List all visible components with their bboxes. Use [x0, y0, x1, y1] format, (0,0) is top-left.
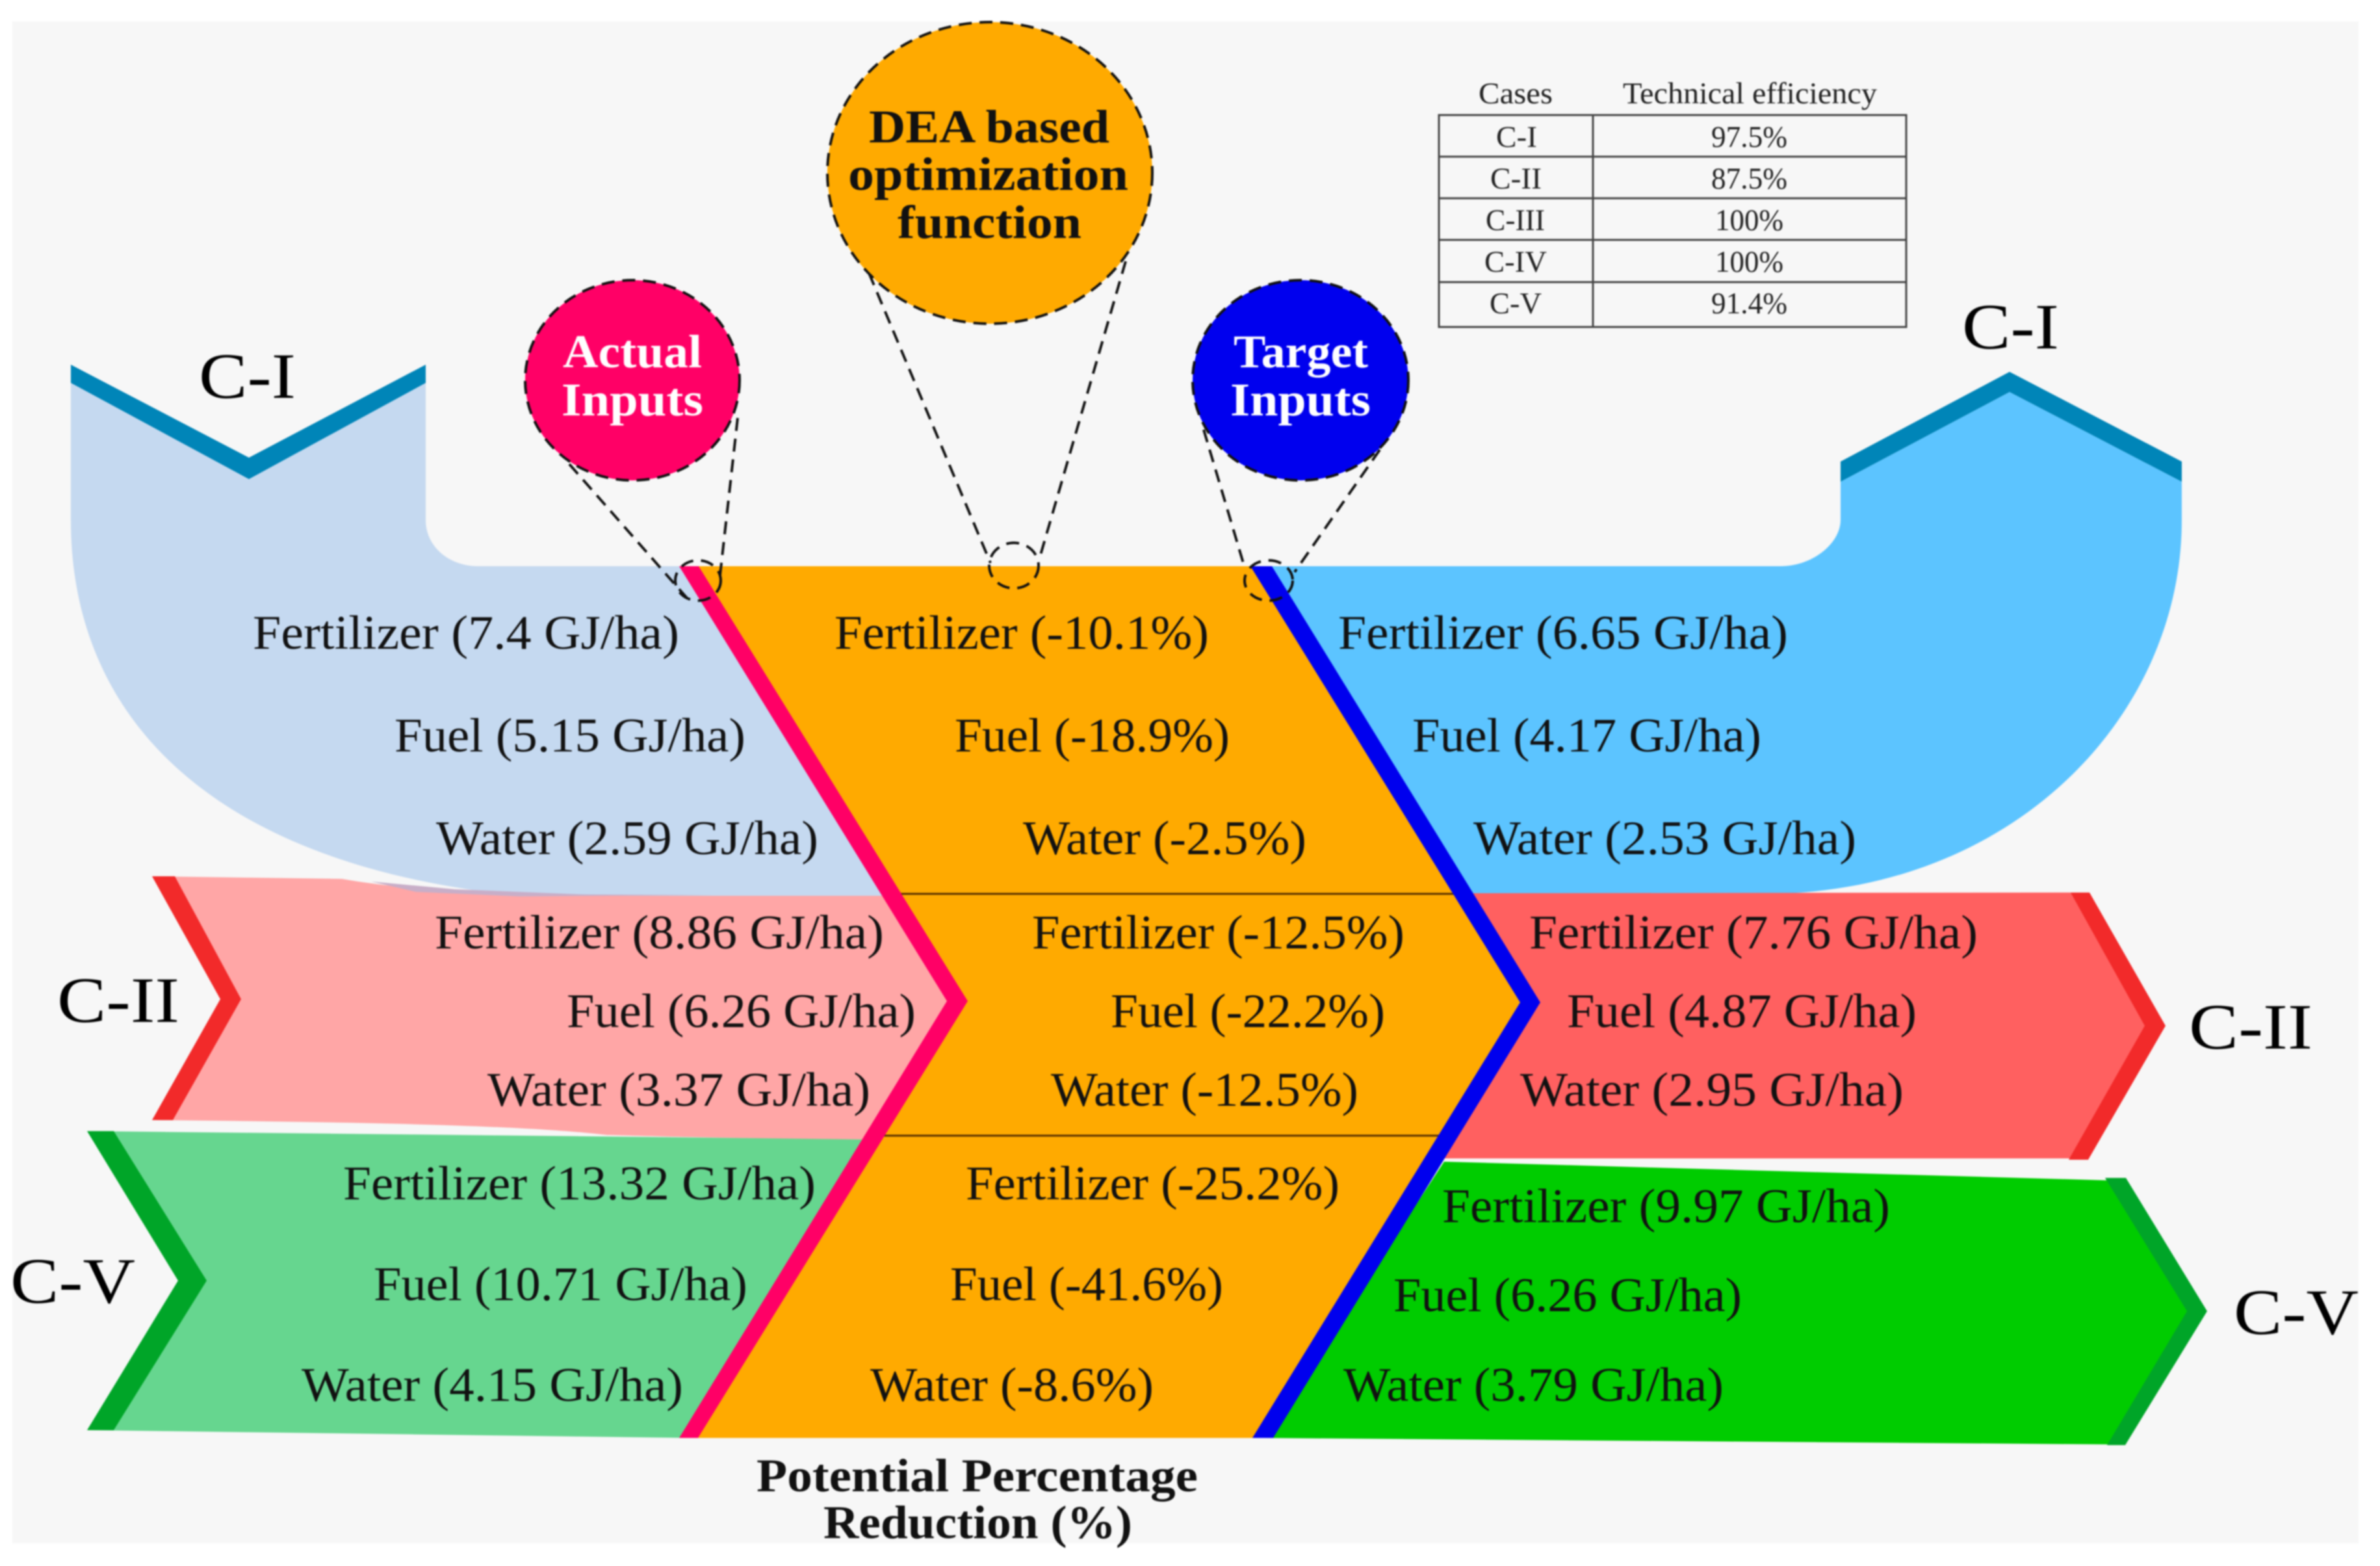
text: C-I actual values: Water (2.59 GJ/ha): [436, 812, 818, 865]
text: C-V target values: Water (3.79 GJ/ha): [1343, 1359, 1724, 1412]
text: C-II target values: Water (2.95 GJ/ha): [1520, 1064, 1904, 1117]
text: C-I reductions: Fuel (-18.9%): [955, 709, 1230, 763]
chevron: C-II left: [152, 876, 241, 1120]
case labels: C-I: [1962, 291, 2059, 363]
table: technical efficiency: C-IV: [1484, 245, 1547, 279]
caption: potential percentage reduction: Reduction (%): [823, 1496, 1132, 1548]
callout: Actual Inputs: Inputs: [562, 374, 703, 426]
chevron: C-V left: [87, 1131, 207, 1430]
panel: C-I target inputs: [1254, 372, 2182, 894]
text: C-V reductions: Fertilizer (-25.2%): [966, 1157, 1339, 1210]
table: technical efficiency: 100%: [1715, 245, 1783, 279]
text: C-V actual values: Fuel (10.71 GJ/ha): [374, 1258, 747, 1311]
case labels: C-II: [57, 964, 179, 1036]
text: C-I target values: [1338, 607, 1856, 865]
text: C-II reductions: Fertilizer (-12.5%): [1032, 906, 1404, 959]
panel: potential reduction: [689, 566, 1527, 1438]
text: C-V actual values: [302, 1157, 816, 1412]
row dividers: [877, 894, 1456, 1136]
panel: C-II actual inputs: [152, 876, 968, 1140]
stripe: target inputs boundary: [1250, 566, 1540, 1438]
callout: Target Inputs: Inputs: [1230, 374, 1371, 426]
text: C-I reductions: Water (-2.5%): [1023, 812, 1306, 865]
text: C-I actual values: [253, 607, 818, 865]
text: C-I actual values: Fuel (5.15 GJ/ha): [395, 709, 745, 763]
text: C-I target values: Fertilizer (6.65 GJ/ha): [1338, 607, 1788, 660]
chevron: C-I left: [71, 365, 426, 479]
table: technical efficiency: C-III: [1486, 203, 1545, 237]
callout: Actual Inputs: Actual: [563, 326, 702, 378]
table: technical efficiency: C-V: [1490, 287, 1542, 320]
text: C-I target values: Fuel (4.17 GJ/ha): [1412, 709, 1761, 763]
table: technical efficiency: 91.4%: [1711, 287, 1787, 320]
case labels: C-II: [2189, 991, 2312, 1063]
text: C-V target values: [1343, 1180, 1890, 1412]
text: C-II target values: [1520, 906, 1978, 1117]
case labels: C-V: [2234, 1276, 2359, 1348]
callout: DEA based optimization function: function: [898, 196, 1081, 248]
chevron: C-I right: [1841, 372, 2182, 482]
text: C-V reductions: [870, 1157, 1339, 1412]
text: C-V actual values: Fertilizer (13.32 GJ/ha): [343, 1157, 816, 1210]
callout leaders: [569, 261, 1380, 601]
text: C-II reductions: Fuel (-22.2%): [1111, 985, 1385, 1038]
table: technical efficiency: Technical efficiency: [1623, 77, 1877, 111]
case labels: C-I: [199, 340, 296, 412]
callout: Target Inputs: [1193, 280, 1408, 480]
text: C-II target values: Fuel (4.87 GJ/ha): [1567, 985, 1917, 1038]
text: C-V reductions: Water (-8.6%): [870, 1359, 1154, 1412]
table: technical efficiency: C-I: [1496, 120, 1537, 154]
case labels: C-V: [10, 1245, 135, 1317]
caption: potential percentage reduction: Potential Percentage: [757, 1450, 1198, 1502]
callout: Target Inputs: Target: [1234, 326, 1368, 378]
text: C-II reductions: [1032, 906, 1404, 1117]
table: technical efficiency: [1439, 77, 1906, 327]
table: technical efficiency: 100%: [1715, 203, 1783, 237]
text: C-II target values: Fertilizer (7.76 GJ/ha): [1529, 906, 1978, 959]
panel: C-II target inputs: [1436, 893, 2166, 1160]
text: C-II reductions: Water (-12.5%): [1051, 1064, 1358, 1117]
text: C-I reductions: [834, 607, 1306, 865]
text: C-V target values: Fertilizer (9.97 GJ/ha): [1442, 1180, 1890, 1233]
text: C-I reductions: Fertilizer (-10.1%): [834, 607, 1209, 660]
table: technical efficiency: C-II: [1490, 162, 1542, 196]
table: technical efficiency: 87.5%: [1711, 162, 1787, 196]
text: C-V target values: Fuel (6.26 GJ/ha): [1393, 1269, 1742, 1322]
panel: C-V target inputs: [1264, 1162, 2207, 1445]
callout: DEA based optimization function: DEA based: [869, 101, 1109, 153]
text: C-II actual values: Fuel (6.26 GJ/ha): [567, 985, 916, 1038]
table: technical efficiency: 97.5%: [1711, 120, 1787, 154]
callout: DEA based optimization function: optimization: [848, 148, 1128, 200]
text: C-II actual values: Fertilizer (8.86 GJ/ha): [435, 906, 884, 959]
text: C-I target values: Water (2.53 GJ/ha): [1473, 812, 1856, 865]
text: C-I actual values: Fertilizer (7.4 GJ/ha): [253, 607, 679, 660]
panel: C-V actual inputs: [87, 1131, 871, 1438]
blended overlap: C-I over C-II: [371, 881, 715, 896]
text: C-II actual values: Water (3.37 GJ/ha): [487, 1064, 870, 1117]
chevron: C-II right: [2069, 893, 2166, 1160]
callout: DEA based optimization function: [827, 22, 1152, 324]
caption: potential percentage reduction: [757, 1450, 1198, 1548]
text: C-V reductions: Fuel (-41.6%): [950, 1258, 1223, 1311]
text: C-II actual values: [435, 906, 916, 1117]
panel: C-I actual inputs: [71, 365, 910, 896]
table: technical efficiency: Cases: [1479, 77, 1553, 111]
stripe: actual inputs boundary: [679, 566, 968, 1438]
chevron: C-V right: [2105, 1178, 2207, 1445]
callout: Actual Inputs: [525, 280, 740, 480]
text: C-V actual values: Water (4.15 GJ/ha): [302, 1359, 683, 1412]
case labels: [10, 291, 2359, 1348]
